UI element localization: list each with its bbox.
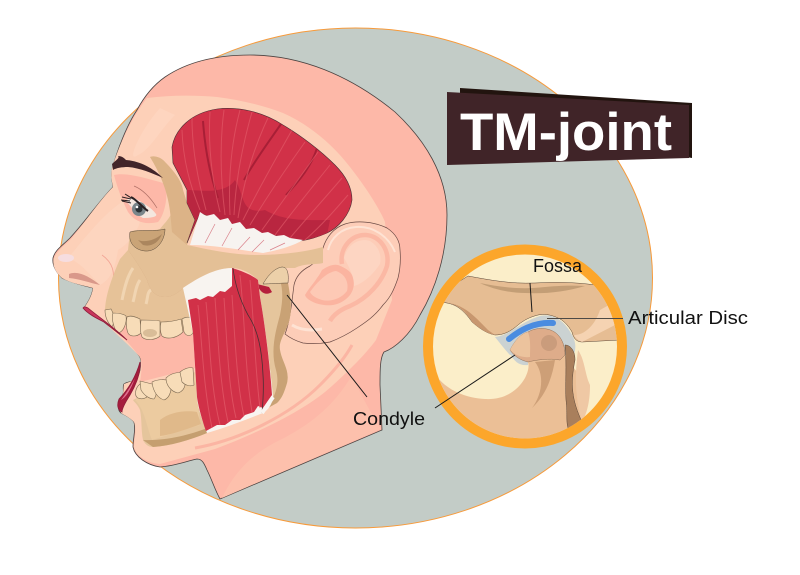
line: fossa bbox=[530, 283, 532, 312]
eye bbox=[121, 186, 157, 218]
upper teeth bbox=[105, 309, 193, 340]
ear inner helix band bbox=[330, 235, 388, 321]
eye socket floor bbox=[130, 229, 165, 251]
leader lines bbox=[287, 283, 623, 408]
skull bbox=[105, 156, 323, 447]
line: articular disc bbox=[547, 318, 623, 320]
lower lip bbox=[118, 362, 140, 412]
jaw crease bbox=[195, 345, 352, 448]
fossa bone bbox=[444, 276, 617, 342]
temporalis muscle bbox=[172, 108, 352, 253]
mandible bone lower bbox=[439, 355, 584, 438]
temporalis tendon bbox=[190, 212, 303, 253]
inset: joint close-up bbox=[428, 250, 630, 460]
nostril bbox=[69, 273, 100, 285]
cheek bone shade bbox=[128, 250, 183, 298]
lobe highlight bbox=[292, 325, 322, 330]
synovial capsule bbox=[495, 315, 576, 355]
line: condyle on inset bbox=[435, 355, 515, 408]
articular disc bbox=[509, 323, 553, 339]
condyle of jaw bbox=[263, 267, 288, 284]
head illustration bbox=[53, 55, 447, 499]
cranium and brow bbox=[128, 156, 323, 297]
lighter face area bbox=[53, 96, 392, 464]
upper lip bbox=[83, 307, 127, 340]
eye shadow area bbox=[114, 174, 166, 223]
mouth interior bbox=[112, 325, 195, 382]
title: TM-joint bbox=[460, 103, 672, 162]
ear concha bbox=[305, 265, 354, 305]
masseter muscle bbox=[183, 268, 273, 433]
label: Articular Disc: Articular Disc bbox=[628, 308, 748, 328]
ear bbox=[285, 222, 400, 344]
label: Fossa: Fossa bbox=[533, 256, 583, 276]
lower teeth bbox=[136, 368, 194, 400]
nose tip highlight bbox=[58, 254, 74, 262]
highlights on forehead and nose bbox=[133, 108, 175, 157]
right bone of the ear canal bbox=[576, 350, 590, 422]
eyebrow bbox=[112, 156, 163, 178]
ramus shading bbox=[565, 345, 582, 432]
condyle head bbox=[510, 328, 565, 362]
mandible bbox=[133, 268, 291, 447]
inset background bbox=[428, 250, 622, 444]
background ellipse bbox=[58, 28, 652, 528]
neck lighter wedge bbox=[222, 375, 381, 498]
infographic: TM-joint anatomy bbox=[52, 28, 748, 528]
maxilla bbox=[105, 250, 193, 333]
title banner bbox=[447, 88, 692, 165]
line: condyle on head bbox=[287, 295, 367, 397]
head silhouette bbox=[53, 55, 447, 499]
label: Condyle: Condyle bbox=[353, 409, 425, 429]
